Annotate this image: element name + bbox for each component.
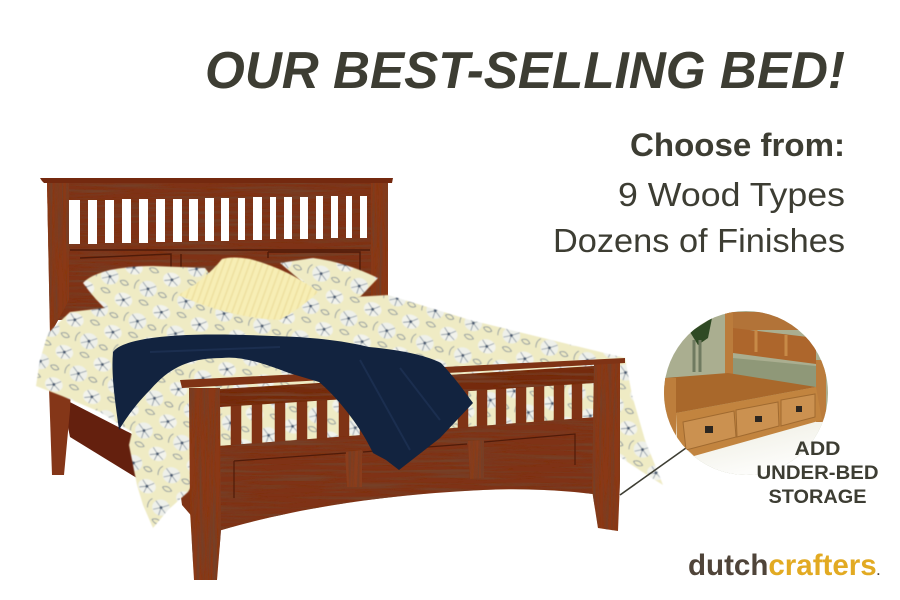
navy blanket — [112, 334, 473, 470]
platform front — [676, 387, 822, 456]
wood types: 9 Wood Types — [618, 176, 845, 213]
bedding — [36, 295, 663, 528]
headboard — [40, 178, 393, 335]
headboard storage — [725, 310, 826, 422]
right pillow — [280, 258, 378, 305]
platform top — [664, 373, 816, 413]
plant — [690, 318, 712, 372]
wall — [660, 308, 835, 478]
panel recess lines — [234, 434, 575, 498]
headboard top cap — [40, 178, 393, 183]
footboard top rail — [205, 365, 610, 408]
left pillow — [83, 266, 222, 313]
drawers — [683, 394, 815, 450]
footboard slats — [236, 375, 577, 452]
footboard — [180, 358, 625, 580]
subheading: Choose from: — [630, 127, 845, 163]
side rail and far leg — [49, 388, 195, 520]
callout: add under-bed storage — [756, 439, 878, 508]
left post — [189, 388, 221, 580]
top cap — [180, 358, 625, 388]
left rail — [664, 378, 676, 440]
callout text line 3: STORAGE — [768, 487, 866, 508]
bed illustration — [36, 178, 663, 580]
right post — [592, 362, 620, 531]
floor — [667, 415, 825, 475]
footboard lower panel — [205, 416, 610, 535]
callout text line 2: UNDER-BED — [756, 463, 878, 484]
connector line — [620, 448, 686, 495]
finishes: Dozens of Finishes — [553, 222, 845, 259]
title: OUR BEST-SELLING BED! — [205, 42, 845, 100]
headboard panel lines — [70, 250, 370, 280]
callout text line 1: ADD — [794, 439, 840, 460]
text block: choose from — [553, 127, 845, 259]
headboard left post — [47, 183, 69, 335]
inset photo: under-bed storage — [664, 311, 828, 475]
panel divider — [345, 440, 484, 487]
headboard right post — [371, 183, 388, 300]
drawer handles — [705, 406, 802, 433]
yellow throw pillow — [178, 258, 318, 320]
logo: dutchcrafters: dutchcrafters. — [688, 549, 880, 582]
